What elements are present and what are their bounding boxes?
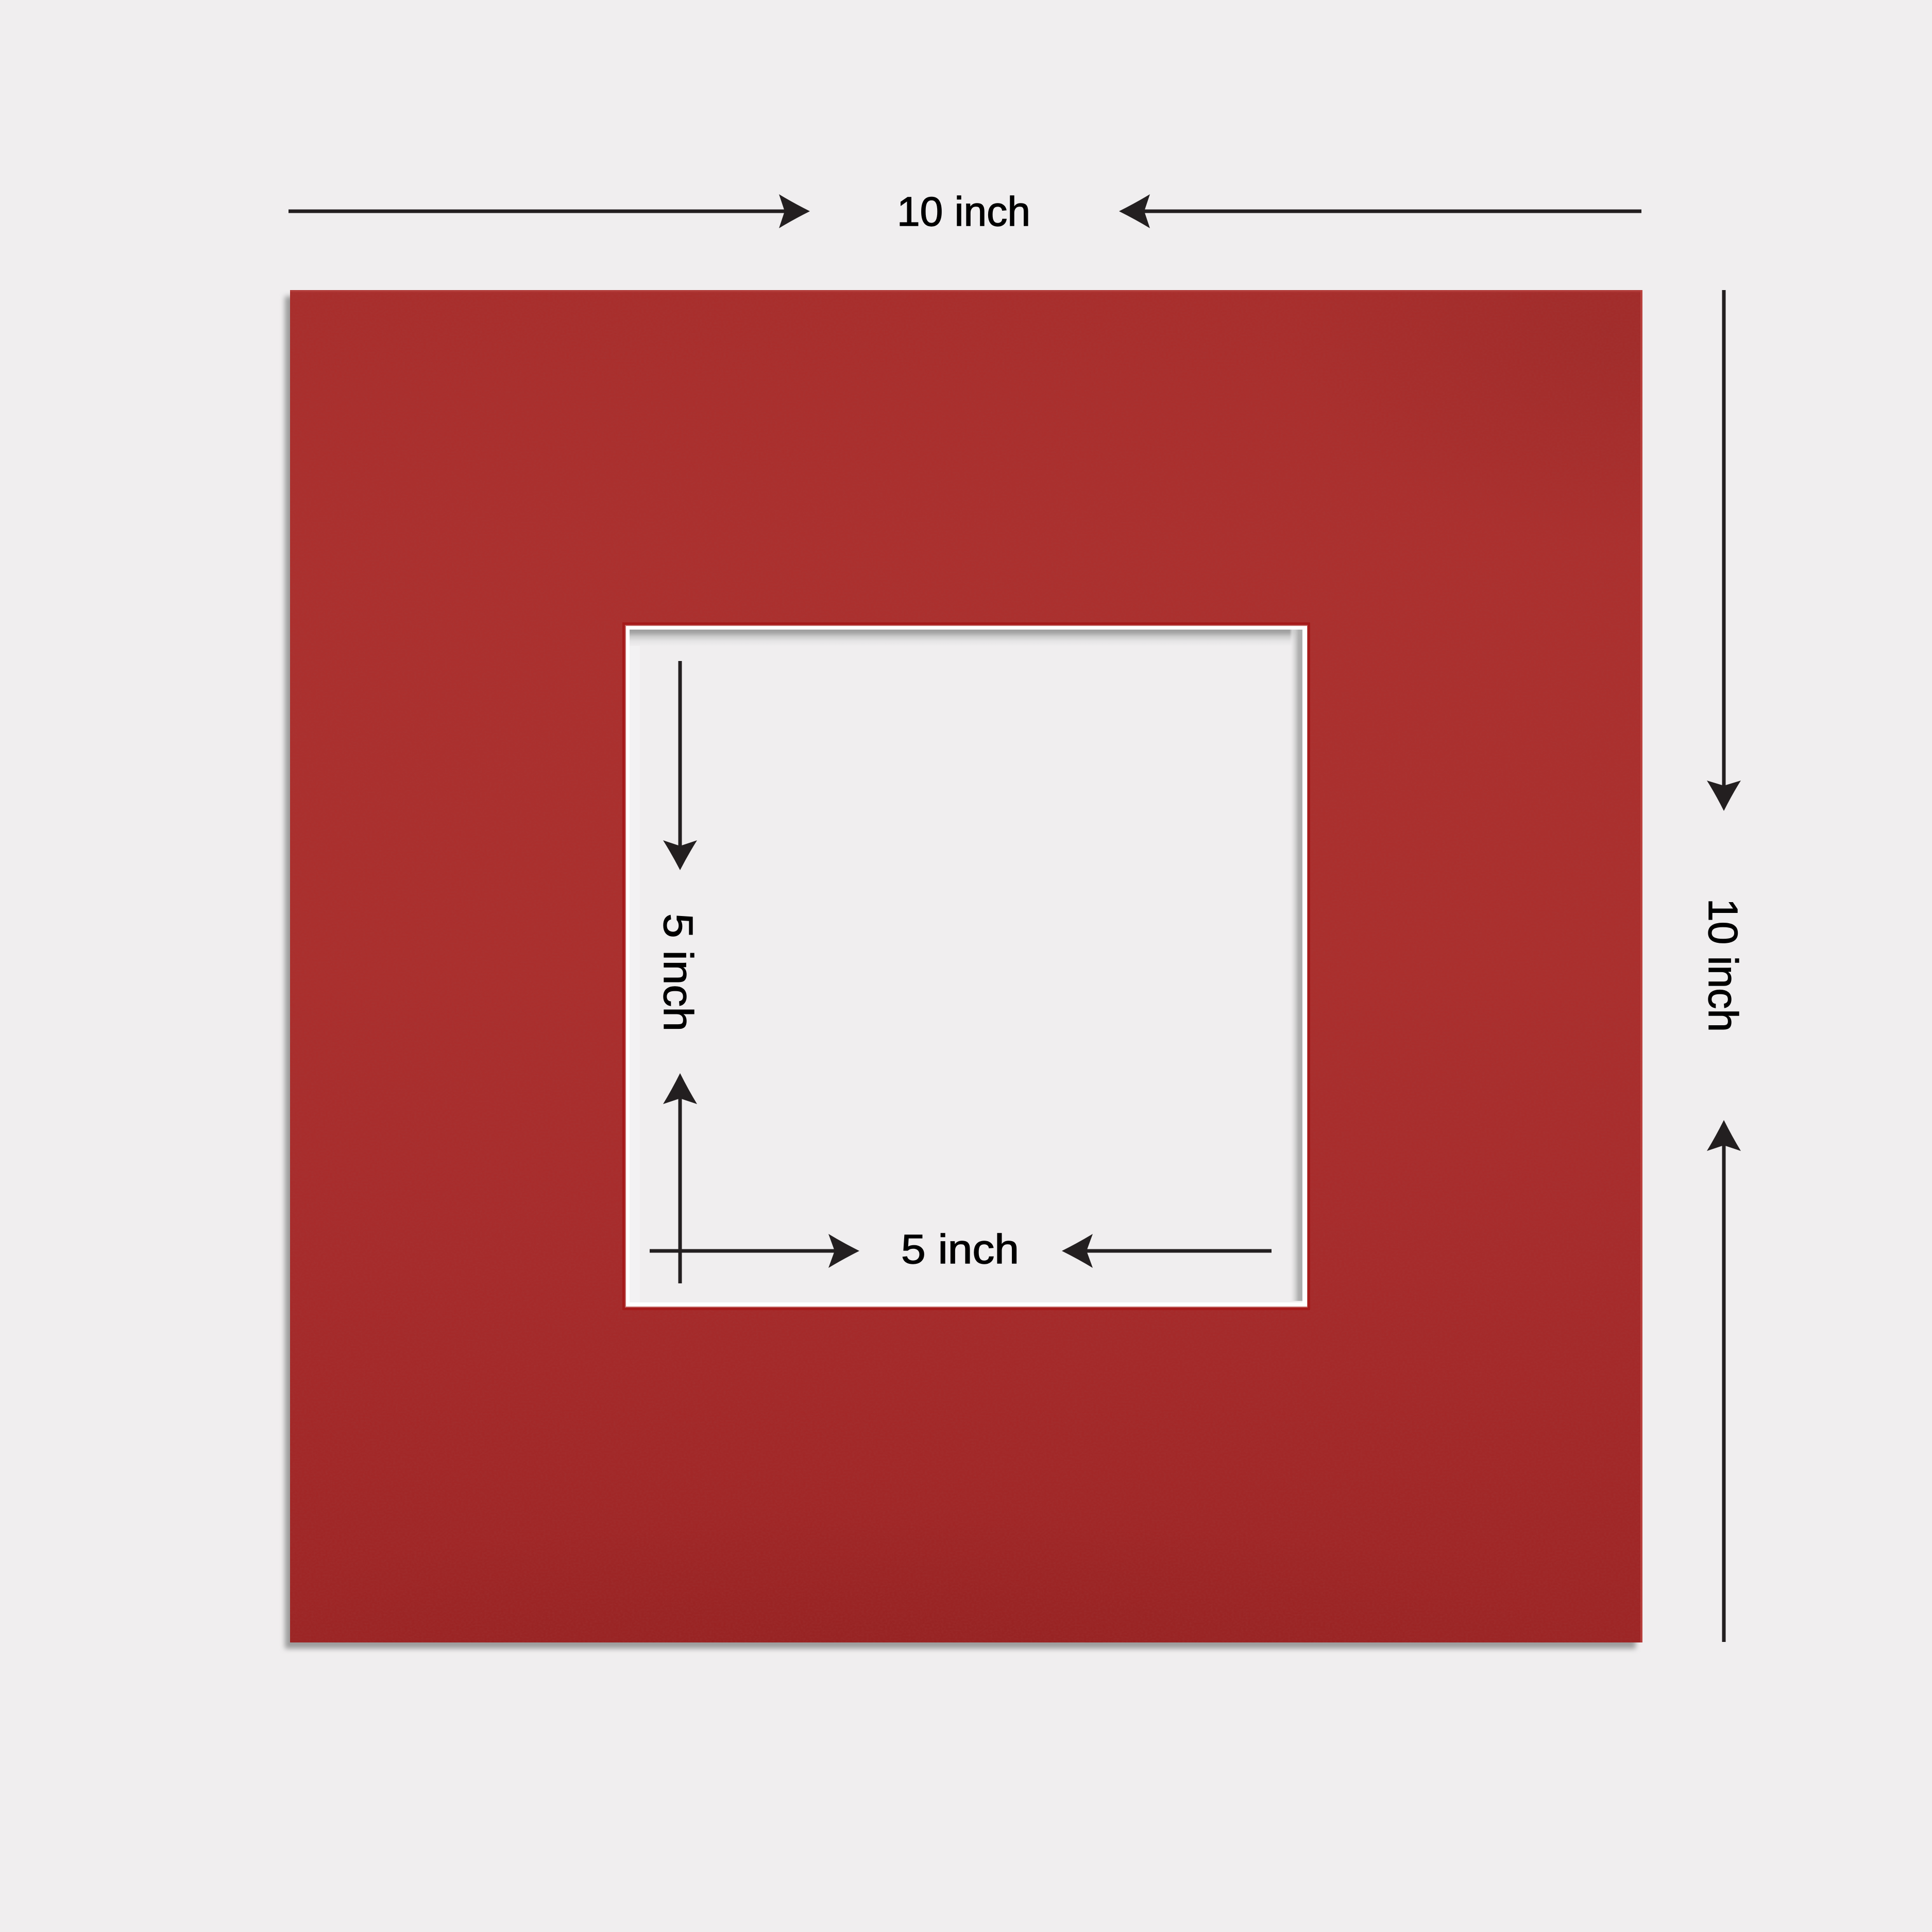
mat drop shadow: [285, 296, 1636, 1649]
arrow: inner pointing left: [1062, 1234, 1272, 1268]
arrow: inner pointing down: [663, 661, 697, 870]
arrow: right side pointing down: [1707, 290, 1741, 811]
label: 10 inch right: 10 inch: [1700, 899, 1746, 1032]
mat surface: [290, 290, 1642, 1642]
window cut bevel: [622, 622, 1310, 1310]
arrow: inner pointing up: [663, 1073, 697, 1283]
window opening: [630, 630, 1302, 1302]
arrow: top left pointing right: [289, 194, 810, 228]
arrow: top right pointing left: [1119, 194, 1641, 228]
dimension: inner horizontal 5 inch: [650, 1226, 1272, 1272]
dimension: top 10 inch: [289, 189, 1641, 234]
arrow: right side pointing up: [1707, 1120, 1741, 1642]
label: 5 inch horizontal: 5 inch: [901, 1226, 1019, 1272]
panel: red mat board with window: [282, 290, 1642, 1652]
dimension: right 10 inch: [1700, 290, 1746, 1642]
label: 5 inch vertical: 5 inch: [655, 913, 701, 1031]
dimension: inner vertical 5 inch: [655, 661, 701, 1283]
infographic: mat board dimensions: [282, 194, 1741, 1652]
label: 10 inch top: 10 inch: [897, 189, 1030, 234]
arrow: inner pointing right: [650, 1234, 859, 1268]
